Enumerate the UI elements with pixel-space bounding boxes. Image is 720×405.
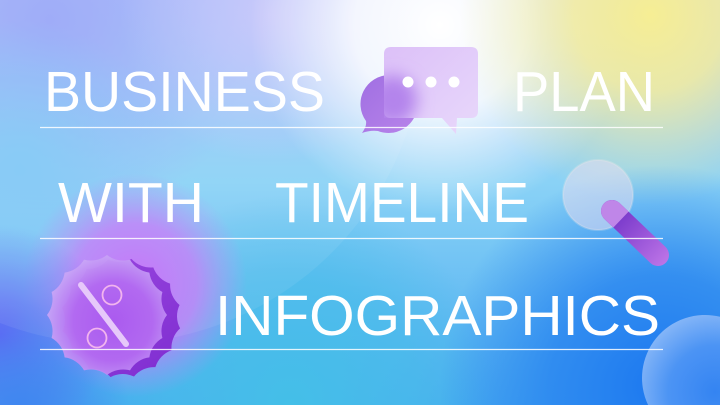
handle collar cap: [601, 200, 623, 222]
percent top ring: [102, 286, 122, 304]
seal back shadow: [51, 248, 191, 388]
icon: magnifier: [563, 160, 658, 255]
percent bottom ring: [88, 328, 106, 348]
percent slash: [81, 285, 126, 344]
icon: percent seal: [47, 248, 191, 388]
word: business: BUSINESS: [44, 60, 325, 124]
glass sphere: [642, 315, 720, 405]
seal front: [47, 255, 167, 375]
lens: [563, 160, 633, 230]
overlap glow: [384, 67, 426, 118]
handle collar: [612, 211, 621, 220]
front bubble: [384, 47, 478, 134]
word: plan: PLAN: [513, 60, 655, 124]
title: [44, 60, 660, 348]
word: infographics: INFOGRAPHICS: [215, 284, 660, 348]
word: timeline: TIMELINE: [275, 171, 529, 235]
typing dots: [402, 76, 460, 88]
handle: [612, 211, 658, 255]
back bubble: [360, 75, 418, 133]
icon: chat bubbles: [360, 47, 478, 134]
timeline rules: [40, 128, 663, 350]
word: with: WITH: [58, 171, 204, 235]
